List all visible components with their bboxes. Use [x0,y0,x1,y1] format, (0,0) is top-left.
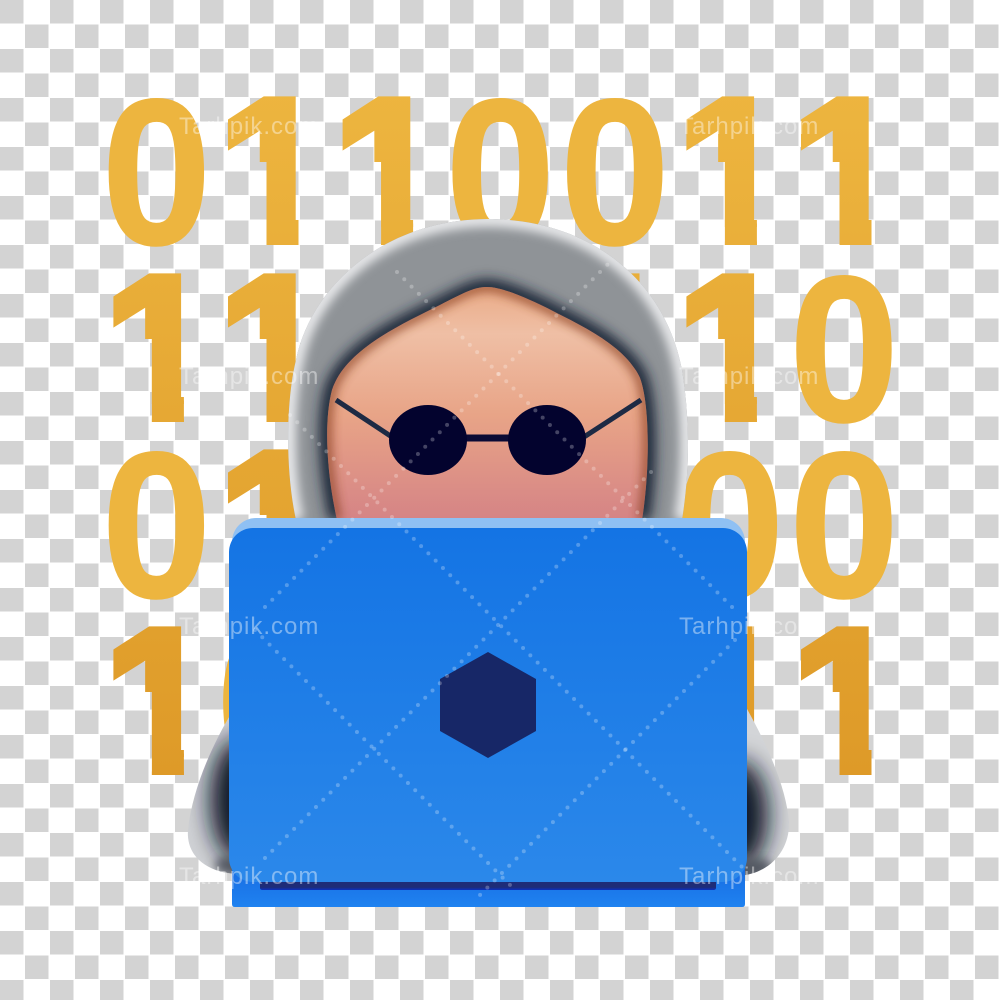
hexagon logo [440,652,536,758]
binary digits background: 0 [216,585,326,818]
binary digits background: 0 [331,585,441,818]
watermark labels: Tarhpik.com [679,363,819,390]
binary digits background: 0 [675,408,784,641]
laptop lid [229,528,747,882]
face [320,280,655,525]
binary digits background: 0 [102,55,211,288]
left shoulder [188,717,232,874]
binary digits background: 0 [789,408,899,641]
binary digits background: 111 [214,407,675,643]
binary digits background: 0 [445,408,555,641]
watermark dotted lines [255,260,747,900]
laptop [229,518,747,907]
watermark labels: Tarhpik.com [179,363,319,390]
binary digits background: 1111 [214,54,904,290]
binary digits background: 0 [445,232,555,465]
laptop base [232,860,745,907]
hood [288,219,688,518]
watermark labels: Tarhpik.com [179,113,319,140]
laptop hinge strip [260,882,716,890]
binary digits background: 0 [560,55,670,288]
binary digits background [99,54,904,820]
laptop lid rim [232,518,745,578]
binary digits background: 1111 [99,231,790,467]
binary digits background: 0 [102,408,211,641]
watermark labels: Tarhpik.com [179,613,319,640]
watermark labels: Tarhpik.com [179,863,319,890]
watermark labels [179,113,819,890]
hacker figure [180,210,795,880]
sunglasses [336,400,641,475]
binary digits background: 0 [445,55,555,288]
binary digits background: 1111 [99,584,904,820]
watermark labels: Tarhpik.com [679,613,819,640]
watermark labels: Tarhpik.com [679,113,819,140]
watermark labels: Tarhpik.com [679,863,819,890]
binary digits background: 0 [331,232,441,465]
right shoulder [745,709,788,876]
binary digits background: 0 [560,585,670,818]
binary digits background: 0 [789,232,899,465]
